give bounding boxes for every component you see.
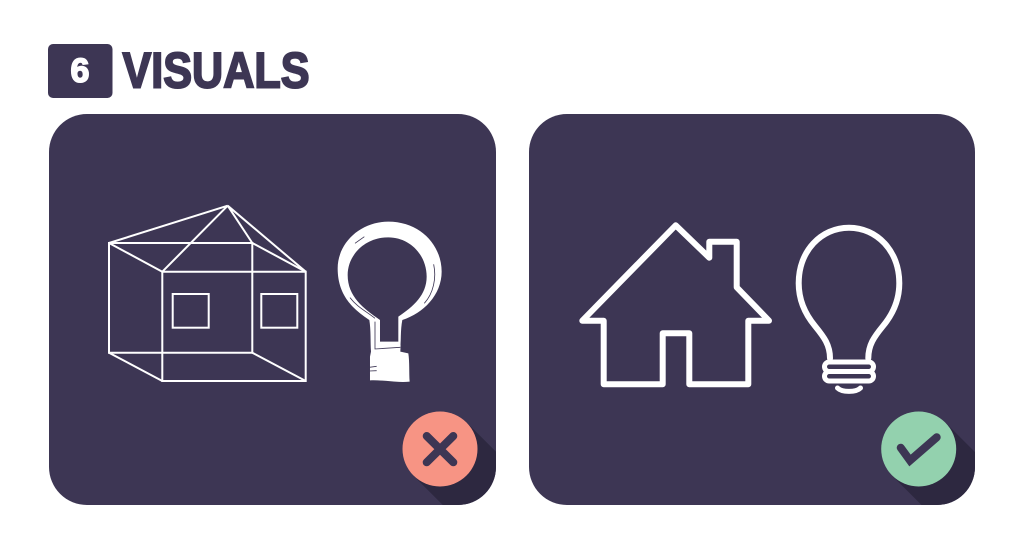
badge circle bbox=[402, 412, 478, 486]
section number badge bbox=[48, 44, 112, 98]
icon: clean light bulb bbox=[799, 228, 899, 391]
badge circle bbox=[881, 412, 956, 486]
icon: sketchy wireframe house bbox=[109, 206, 306, 381]
panel: bad visuals bbox=[49, 114, 496, 505]
check badge bbox=[881, 412, 975, 505]
section number badge: 6 bbox=[71, 52, 89, 90]
panel: good visuals bbox=[529, 114, 975, 505]
badge shadow bbox=[414, 422, 496, 505]
icon: clean house bbox=[582, 225, 769, 384]
cross badge bbox=[402, 412, 496, 505]
icon: cross bbox=[427, 436, 453, 462]
icon: sketchy light bulb bbox=[338, 222, 442, 382]
title: VISUALS bbox=[122, 42, 310, 98]
icon: check mark bbox=[901, 437, 937, 460]
badge shadow bbox=[892, 424, 975, 505]
